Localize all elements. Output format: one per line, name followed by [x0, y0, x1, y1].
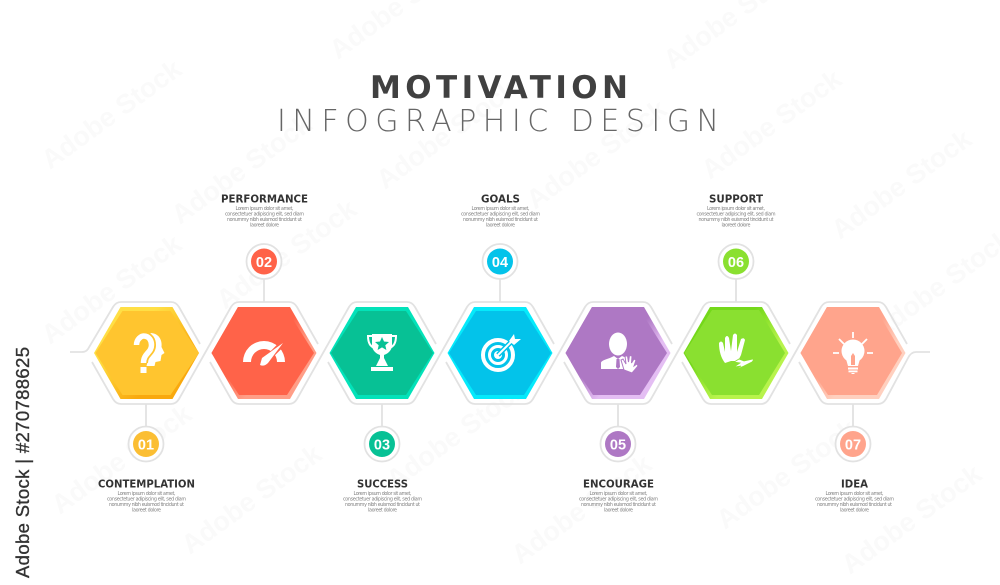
hexagon 6: support [684, 307, 788, 399]
side credit text: Adobe Stock | #270788625 [12, 347, 33, 578]
text: Adobe Stock [371, 73, 523, 195]
text block: encourage: Lorem ipsum dolor sit amet, [590, 491, 648, 497]
text block: goals: nonummy nibh euismod tincidunt ut [463, 217, 538, 223]
hexagon 3: success [330, 307, 434, 399]
connecting hexagon outline [70, 302, 930, 404]
text block: success: Lorem ipsum dolor sit amet, [354, 491, 412, 497]
text: Adobe Stock [46, 398, 198, 520]
hexagon 1: contemplation [94, 307, 199, 399]
text: Adobe Stock [36, 53, 188, 175]
icon: person with hand [601, 332, 638, 373]
text block: contemplation: consectetuer adipiscing elit, sed diam [107, 496, 186, 502]
text block: success: SUCCESS [357, 478, 408, 490]
marker 02 [246, 244, 282, 302]
text: Adobe Stock [826, 123, 978, 245]
text block: idea: consectetuer adipiscing elit, sed diam [815, 496, 894, 502]
text block: performance: Lorem ipsum dolor sit amet, [236, 206, 294, 212]
text: Adobe Stock [36, 228, 188, 350]
title [277, 70, 719, 139]
marker 06 [718, 244, 754, 302]
text block: idea [815, 478, 894, 514]
text block: success: consectetuer adipiscing elit, sed diam [343, 496, 422, 502]
marker 05: 05 [610, 438, 626, 454]
text block: encourage [579, 478, 658, 514]
text block: support: laoreet dolore [722, 222, 751, 228]
hexagon 7: idea [800, 307, 906, 399]
text block: goals [461, 192, 540, 228]
text block: encourage: nonummy nibh euismod tincidunt ut [581, 502, 656, 508]
hexagon 4: goals [448, 307, 552, 399]
text block: encourage: ENCOURAGE [583, 478, 654, 490]
text block: goals: GOALS [481, 192, 520, 206]
marker 07 [836, 404, 870, 462]
title: motivation: MOTIVATION [370, 70, 628, 106]
text: Adobe Stock [166, 108, 318, 230]
text: Adobe Stock [506, 448, 658, 570]
icon: speedometer [243, 341, 285, 366]
text block: performance: nonummy nibh euismod tincidunt ut [227, 217, 302, 223]
text block: support: consectetuer adipiscing elit, sed diam [696, 212, 776, 218]
text block: performance: laoreet dolore [250, 222, 279, 228]
text block: support: nonummy nibh euismod tincidunt ut [698, 217, 774, 223]
text block: performance: consectetuer adipiscing elit, sed diam [225, 212, 304, 218]
text block: contemplation: CONTEMPLATION [98, 478, 195, 490]
text: Adobe Stock [381, 373, 533, 495]
marker 01: 01 [138, 438, 154, 454]
text block: goals: laoreet dolore [486, 222, 515, 228]
text: Adobe Stock [521, 93, 673, 215]
hexagon 5: encourage [566, 307, 670, 399]
icon: trophy [368, 334, 396, 371]
text: Adobe Stock [176, 438, 328, 560]
text: Adobe Stock [696, 63, 848, 185]
text block: performance [221, 192, 308, 228]
text block: support [696, 192, 776, 228]
title: infographic design: INFOGRAPHIC DESIGN [277, 104, 719, 139]
text block: encourage: consectetuer adipiscing elit, sed diam [579, 496, 658, 502]
text block: idea: Lorem ipsum dolor sit amet, [826, 491, 884, 497]
icon: light bulb [833, 332, 873, 374]
marker 07: 07 [845, 438, 861, 454]
marker 02: 02 [256, 255, 272, 271]
marker 06: 06 [728, 255, 744, 271]
marker 03: 03 [374, 438, 390, 454]
text block: support: Lorem ipsum dolor sit amet, [707, 206, 765, 212]
marker 03 [364, 404, 400, 462]
icon: target with arrow [483, 334, 521, 370]
marker 04: 04 [492, 255, 508, 271]
text block: support: SUPPORT [709, 192, 763, 206]
text block: success: nonummy nibh euismod tincidunt ut [345, 502, 420, 508]
text block: success: laoreet dolore [368, 508, 397, 514]
text block: success [343, 478, 422, 514]
text block: contemplation: nonummy nibh euismod tincidunt ut [109, 502, 184, 508]
text block: idea: laoreet dolore [840, 508, 869, 514]
icon: large and small hands [719, 334, 753, 372]
text block: idea: IDEA [841, 478, 868, 490]
text: Adobe Stock [836, 458, 988, 580]
hexagon 2: performance [212, 307, 316, 399]
text: Adobe Stock [711, 413, 863, 535]
text block: idea: nonummy nibh euismod tincidunt ut [817, 502, 892, 508]
text block: performance: PERFORMANCE [221, 192, 308, 206]
text block: contemplation: laoreet dolore [132, 508, 161, 514]
marker 04 [482, 244, 518, 302]
text block: contemplation: Lorem ipsum dolor sit amet, [118, 491, 176, 497]
text block: contemplation [98, 478, 195, 514]
text block: encourage: laoreet dolore [604, 508, 633, 514]
text: Adobe Stock [211, 193, 363, 315]
text block: goals: Lorem ipsum dolor sit amet, [472, 206, 530, 212]
icon: question mark and head [136, 333, 164, 373]
marker 01 [128, 404, 164, 462]
text block: goals: consectetuer adipiscing elit, sed diam [461, 212, 540, 218]
marker 05 [600, 404, 636, 462]
